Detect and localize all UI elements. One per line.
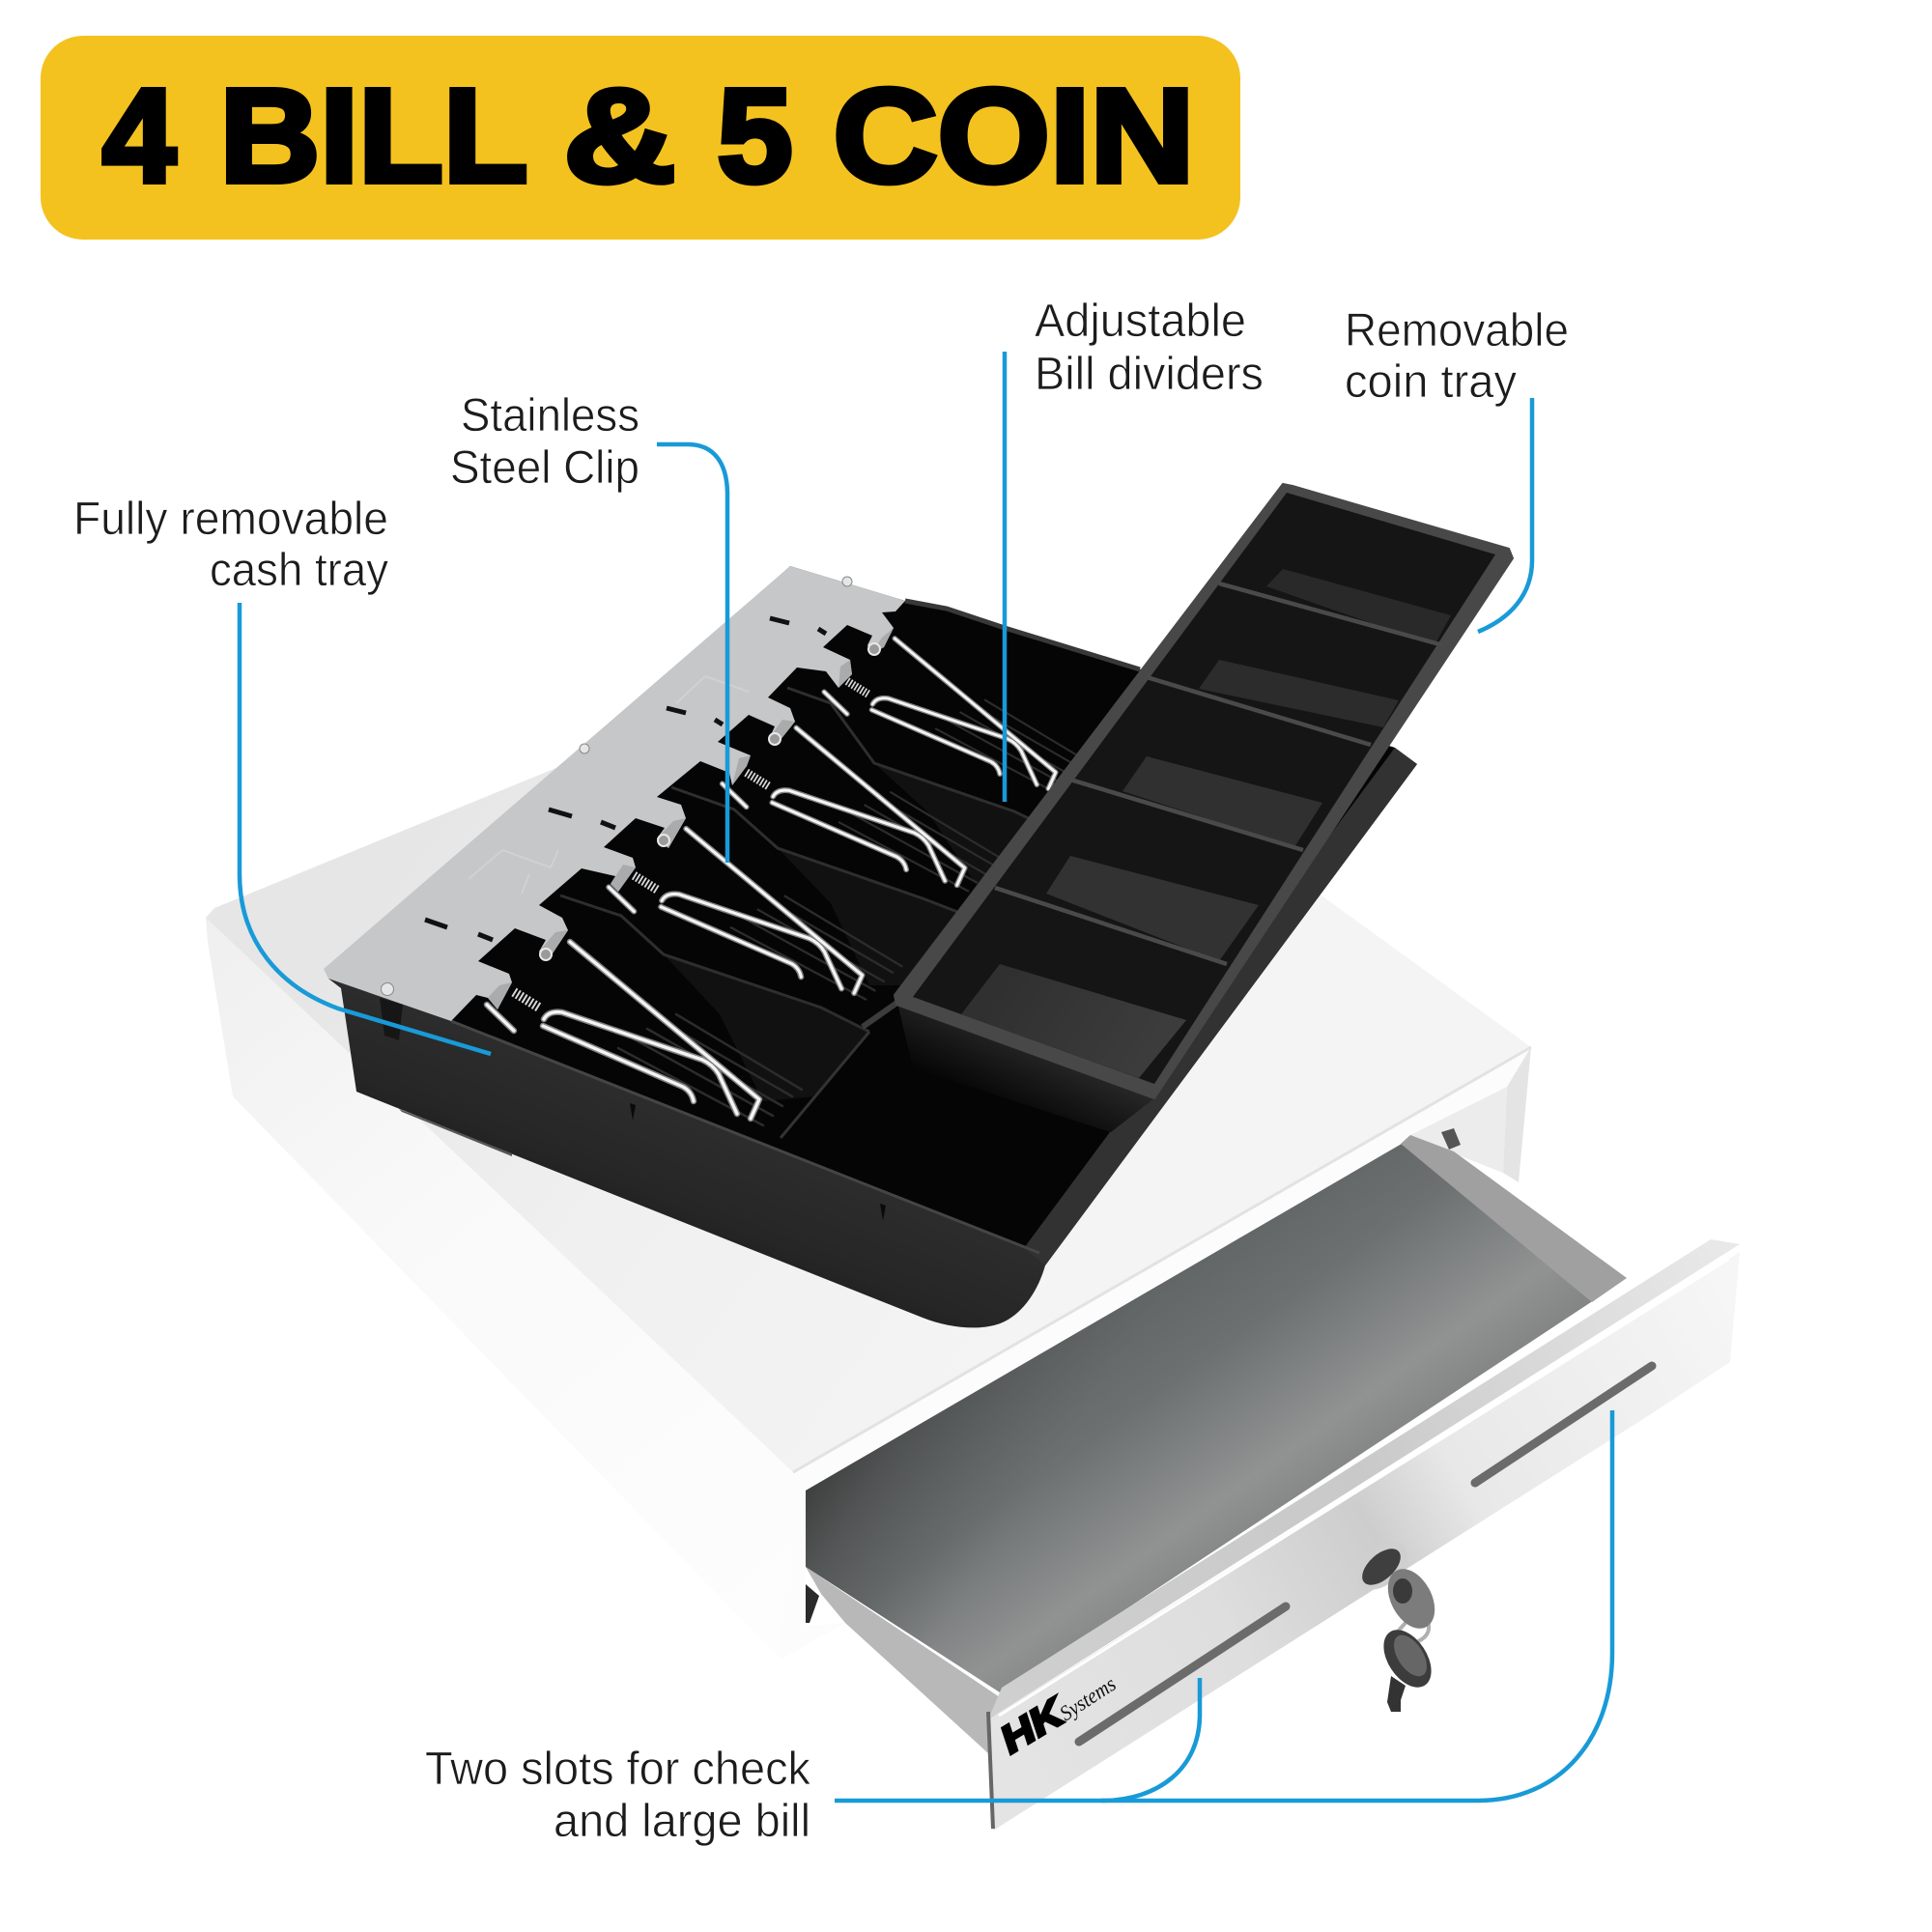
clip 2 [609,829,901,1000]
cabinet front frame [781,1047,1531,1660]
heading: 4 BILL & 5 COIN: 4 [102,62,176,211]
drawer floor [806,1137,1594,1692]
leader: two slots right branch [835,1410,1612,1801]
clip 1 [487,942,802,1125]
label: two slots [425,1744,811,1847]
heading: 4 BILL & 5 COIN [102,62,1194,211]
coin compartment floors [961,569,1451,1078]
base foot [399,1109,512,1156]
label: two slots: and large bill [554,1796,810,1847]
label: adjustable bill dividers [1035,296,1264,400]
lock and keys [1349,1533,1444,1712]
leader: stainless steel clip [657,444,727,863]
heading: 4 BILL & 5 COIN: 5 [717,62,792,211]
front notches [630,1103,886,1221]
coin tray front wall [898,1007,1154,1132]
divider fins [560,688,1070,1101]
frame right jamb [1503,1047,1531,1182]
label: fully removable cash tray: Fully removable [73,494,388,545]
coin tray [895,484,1513,1098]
label: adjustable bill dividers: Bill dividers [1035,349,1264,400]
drawer left rail [806,1567,1000,1753]
frame bevel [793,1047,1531,1472]
tray body [328,566,1417,1327]
clip rollers [540,643,880,960]
cash tray [324,484,1513,1327]
brand logo: HK [993,1690,1074,1762]
coin dividers [995,583,1443,964]
cabinet top face [206,715,1531,1472]
label: removable coin tray [1345,305,1569,408]
left slot [1079,1606,1286,1742]
label: stainless steel clip: Stainless [461,390,639,441]
leader: adjustable bill dividers [1003,352,1007,802]
floor shadow [806,1137,1594,1692]
leader: two slots left branch [1101,1678,1200,1801]
front corner tab [380,998,403,1040]
tray interior [425,570,1395,1253]
cabinet left side [206,918,793,1660]
label: two slots: Two slots for check [425,1744,811,1795]
back wall rim [905,601,1140,669]
front panel [988,1252,1740,1831]
embossed marks [469,676,749,894]
coin compartment divider [781,1032,869,1138]
drawer slide bracket [1441,1128,1461,1150]
heading: 4 BILL & 5 COIN: & [564,62,676,211]
banner background [41,36,1240,240]
panel left edge [988,1712,993,1829]
title banner [41,36,1240,240]
plate screws [381,577,852,995]
brand logo: Systems [1055,1671,1120,1725]
coin tray rim [895,484,1513,1098]
right slot [1475,1366,1652,1483]
label: fully removable cash tray [73,494,388,596]
opening left slit [806,1584,819,1623]
label: removable coin tray: Removable [1345,305,1569,356]
clip 4 [824,639,1092,794]
heading: 4 BILL & 5 COIN: COIN [833,62,1194,211]
label: removable coin tray: coin tray [1345,356,1517,408]
leader: removable coin tray [1478,398,1532,632]
bracket tabs [488,628,894,1009]
heading: 4 BILL & 5 COIN: BILL [220,62,527,211]
opening right of drawer [1410,1087,1507,1173]
coin tray interior [913,493,1495,1084]
leader: fully removable cash tray [240,603,491,1054]
cash drawer cabinet [206,715,1531,1660]
drawer right wall [1401,1135,1627,1302]
bill-side divider bar [863,1002,898,1027]
label: stainless steel clip: Steel Clip [450,442,639,494]
front panel rim [988,1239,1740,1719]
open drawer [806,1135,1740,1831]
label: adjustable bill dividers: Adjustable [1035,296,1246,347]
label: fully removable cash tray: cash tray [210,545,388,596]
clip 3 [723,727,1003,892]
plate slots [425,618,826,940]
front rim [451,1021,1039,1253]
panel fold highlight [999,1259,1729,1716]
label: stainless steel clip [450,390,639,494]
right wall strip [1024,748,1417,1265]
metal clip plate [324,566,905,1021]
brand logo [993,1671,1120,1762]
